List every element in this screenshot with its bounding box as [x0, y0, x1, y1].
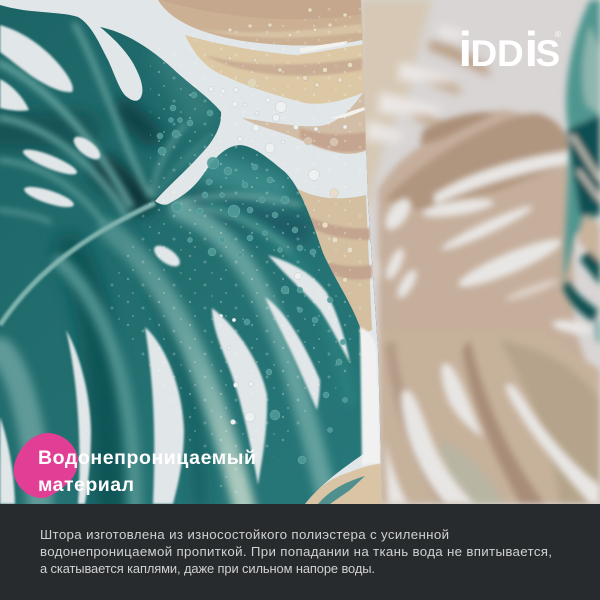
monstera leaf	[0, 5, 365, 504]
logo iDDIS	[458, 23, 561, 77]
pink blob	[14, 433, 78, 498]
tiny droplets	[100, 0, 362, 504]
beige leaf lower	[242, 90, 372, 340]
heading: материал	[38, 474, 134, 496]
beige leaf upper	[158, 0, 365, 104]
bottom text panel	[0, 504, 600, 600]
logo iDDIS: i	[524, 23, 538, 77]
description text: а скатывается каплями, даже при сильном напоре воды.	[40, 561, 375, 576]
blurred teal leaf on right	[563, 0, 600, 345]
logo iDDIS: S	[536, 33, 560, 74]
logo iDDIS: D	[470, 33, 497, 74]
description text: Штора изготовлена из износостойкого полиэстера с усиленной	[40, 527, 449, 542]
heading: Водонепроницаемый	[38, 447, 256, 469]
midrib	[0, 203, 155, 325]
leaf shading and veins	[0, 25, 350, 510]
water drops	[157, 8, 353, 464]
leaf holes	[0, 25, 380, 504]
blurred holes	[373, 150, 600, 504]
bottom beige leaf	[305, 463, 382, 504]
logo iDDIS: D	[497, 33, 524, 74]
photo: blurred curtain side	[355, 0, 600, 510]
blurred fronds	[360, 0, 490, 210]
photo: sharp curtain side	[0, 0, 382, 510]
logo iDDIS: ®	[555, 30, 561, 39]
description text: водонепроницаемой пропиткой. При попадании на ткань вода не впитывается,	[40, 544, 552, 559]
logo iDDIS: i	[458, 23, 472, 77]
blurred leaf	[378, 110, 600, 504]
